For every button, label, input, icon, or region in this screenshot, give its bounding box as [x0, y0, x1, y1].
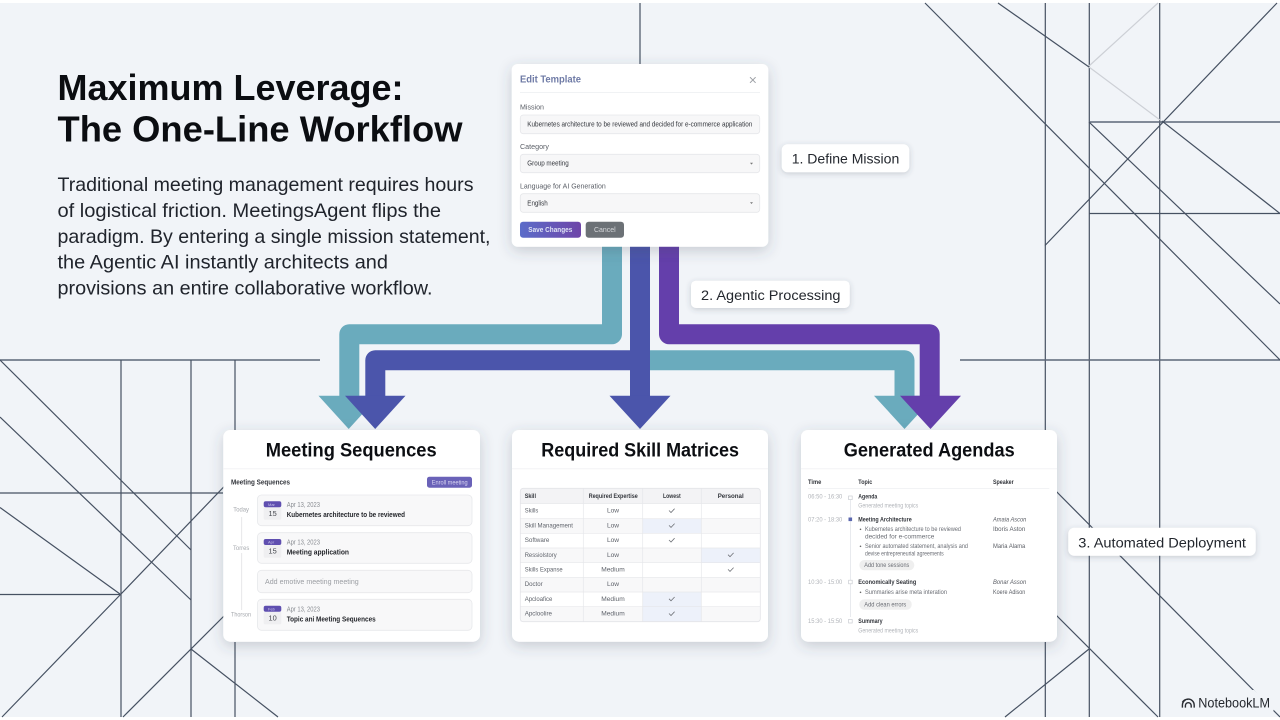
table header	[525, 493, 744, 500]
agenda item: opening: Generated meeting topics	[858, 503, 919, 510]
arrow: teal branch to Generated Agendas	[640, 360, 935, 429]
button: save changes: Save Changes	[528, 225, 572, 234]
agenda item: summary: Summary	[858, 618, 883, 625]
callout: step 1	[782, 144, 909, 172]
button: cancel: Cancel	[594, 225, 616, 234]
skill names: Ressiolstory	[525, 552, 557, 559]
intro paragraph	[58, 174, 490, 300]
expertise levels: Low	[607, 522, 619, 529]
agenda item: architecture: devise entrepreneurial agreements	[865, 550, 944, 557]
skills table	[520, 488, 760, 622]
agenda item: architecture: Meeting Architecture	[858, 516, 912, 523]
category field: Category	[520, 142, 549, 151]
language field: Language for AI Generation	[520, 182, 606, 191]
icon: NotebookLM logo	[1182, 699, 1194, 708]
agenda item: architecture: Amaia Ascon	[992, 516, 1027, 523]
language field	[520, 182, 760, 212]
expertise levels: Medium	[601, 611, 625, 618]
callout: step 3: 3. Automated Deployment	[1078, 535, 1246, 551]
agenda item: opening	[808, 493, 919, 510]
meeting item 2: 15	[268, 547, 277, 556]
expertise levels: Medium	[601, 566, 625, 574]
button: cancel	[586, 222, 624, 238]
button: save changes	[520, 222, 581, 238]
skill names: Apcloolire	[525, 611, 552, 618]
agenda item: opening: Agenda	[858, 493, 877, 500]
add meeting input	[258, 570, 472, 593]
agenda item: opening: 06:50 - 16:30	[808, 493, 843, 500]
meeting item 2: Apr	[268, 540, 275, 545]
agenda item: seating: 10:30 - 15:00	[808, 579, 843, 586]
check marks	[669, 509, 734, 616]
title: Maximum Leverage:	[58, 67, 404, 108]
intro paragraph: provisions an entire collaborative workflow.	[58, 278, 432, 300]
agenda item: architecture: Kubernetes architecture to be reviewed	[865, 526, 961, 533]
agenda column headers: Speaker	[993, 479, 1014, 486]
meeting item 1: Apr 13, 2023	[287, 502, 320, 509]
table header: Personal	[718, 493, 744, 500]
meeting item 3: Topic ani Meeting Sequences	[287, 614, 376, 623]
expertise levels: Low	[607, 581, 619, 588]
skill names: Apcloafice	[525, 596, 553, 603]
arrow: purple branch to Generated Agendas	[669, 240, 961, 429]
table header: Required Expertise	[589, 493, 638, 500]
skill names: Skills	[525, 508, 539, 515]
timeline: Torres	[233, 545, 249, 552]
dialog heading: Edit Template	[520, 75, 581, 86]
agenda item: seating: Summaries arise meta interation	[865, 589, 947, 596]
icon: close	[750, 77, 756, 83]
meeting item 1: 15	[268, 509, 277, 518]
meeting item 1: Kubernetes architecture to be reviewed	[287, 510, 405, 519]
meeting item 3	[258, 599, 472, 630]
agenda item: summary	[808, 618, 919, 634]
meeting item 2: Meeting application	[287, 548, 349, 557]
callout: step 1: 1. Define Mission	[792, 152, 899, 168]
timeline rail	[848, 496, 852, 623]
meeting item 3: 10	[268, 613, 277, 622]
meeting item 2: Apr 13, 2023	[287, 540, 320, 547]
NotebookLM watermark: NotebookLM	[1198, 695, 1270, 711]
NotebookLM watermark	[1172, 690, 1274, 717]
panel: required skill matrices	[512, 430, 768, 642]
callout: step 2	[691, 281, 850, 308]
heading: Generated Agendas	[844, 440, 1015, 462]
callout: step 3	[1068, 528, 1256, 556]
title	[58, 67, 464, 150]
title: The One-Line Workflow	[58, 109, 464, 150]
skill names: Software	[525, 537, 550, 544]
meeting item 3: Apr 13, 2023	[287, 607, 320, 614]
agenda item: seating: Koere Adison	[993, 589, 1026, 596]
list header: Meeting Sequences	[231, 477, 290, 486]
mission field	[520, 102, 760, 134]
agenda item: seating: Economically Seating	[858, 579, 916, 586]
meeting item 2	[258, 533, 472, 563]
expertise levels: Low	[607, 537, 619, 544]
timeline: Today	[233, 507, 250, 514]
skill names: Doctor	[525, 581, 543, 588]
arrow: indigo branch to Meeting Sequences	[345, 360, 640, 429]
arrow: indigo trunk to Required Skill Matrices	[610, 240, 670, 429]
agenda item: summary: Generated meeting topics	[858, 627, 919, 634]
agenda item: seating	[808, 579, 1027, 610]
table header: Lowest	[663, 493, 681, 500]
timeline: Thorson	[231, 612, 251, 619]
panel: meeting sequences	[223, 430, 480, 642]
intro paragraph: of logistical friction. MeetingsAgent flips the	[58, 200, 441, 222]
agenda item: architecture	[808, 516, 1027, 570]
branching flow arrows	[318, 240, 961, 429]
callout: step 2: 2. Agentic Processing	[701, 288, 840, 304]
mission field: Mission	[520, 102, 544, 111]
table header: Skill	[525, 493, 536, 500]
agenda column headers: Topic	[858, 479, 872, 486]
mission field: Kubernetes architecture to be reviewed and decided for e-commerce application	[527, 119, 752, 128]
intro paragraph: the Agentic AI instantly architects and	[58, 252, 388, 274]
add meeting input: Add emotive meeting meeting	[265, 577, 359, 586]
meeting item 1: Mar	[268, 502, 276, 507]
agenda item: architecture: 07:20 - 18:30	[808, 516, 843, 523]
agenda item: architecture: decided for e-commerce	[865, 533, 934, 540]
language field: English	[527, 198, 548, 207]
arrow: teal branch to Meeting Sequences	[318, 240, 612, 429]
meeting item 1	[258, 495, 472, 526]
expertise levels: Low	[607, 552, 619, 559]
agenda item: architecture: Maria Alama	[993, 543, 1026, 550]
expertise levels: Medium	[601, 596, 625, 603]
panel: edit template dialog	[512, 64, 768, 247]
heading: Required Skill Matrices	[541, 440, 739, 462]
agenda column headers	[808, 479, 1049, 489]
agenda item: seating: Bonar Asson	[993, 579, 1027, 586]
agenda item: summary: 15:30 - 15:50	[808, 618, 843, 625]
intro paragraph: Traditional meeting management requires hours	[58, 174, 474, 196]
agenda column headers: Time	[808, 479, 821, 486]
expertise levels: Low	[607, 508, 619, 515]
panel: generated agendas	[801, 430, 1057, 642]
category field	[520, 142, 760, 173]
expertise levels	[601, 508, 625, 618]
skill names	[525, 508, 573, 618]
meeting item 3: Feb	[268, 606, 276, 611]
skill names: Skills Expanse	[525, 566, 563, 574]
intro paragraph: paradigm. By entering a single mission statement,	[58, 226, 490, 248]
button: enroll meeting	[427, 477, 472, 488]
heading: Meeting Sequences	[266, 440, 437, 462]
agenda item: seating: Add clean errors	[864, 602, 907, 609]
agenda item: architecture: Iboris Aston	[993, 526, 1026, 533]
agenda item: architecture: Senior automated statement, analysis and	[865, 543, 968, 550]
agenda item: architecture: Add tone sessions	[864, 562, 910, 569]
button: enroll meeting: Enroll meeting	[432, 480, 468, 487]
timeline	[231, 507, 251, 619]
category field: Group meeting	[527, 158, 569, 167]
skill names: Skill Management	[525, 522, 573, 529]
